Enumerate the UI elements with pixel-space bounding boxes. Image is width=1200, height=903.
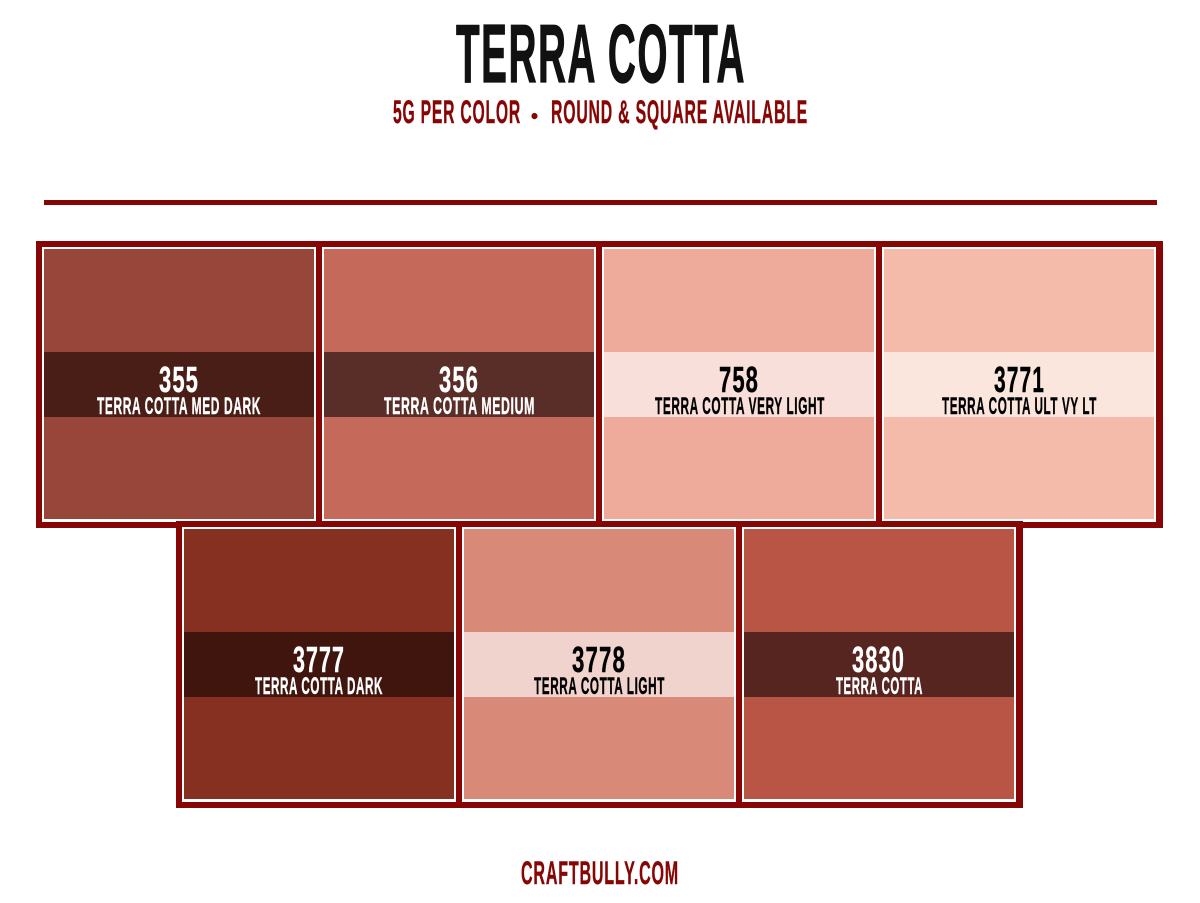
swatch: 355: 355 — [159, 359, 199, 400]
footer: CRAFTBULLY.COM — [521, 855, 679, 891]
swatch: 355 — [42, 247, 316, 522]
swatch: 356: TERRA COTTA MEDIUM — [384, 393, 535, 420]
swatch: 356 — [322, 247, 596, 522]
swatch: 3830 — [742, 527, 1016, 802]
swatch: 3777: TERRA COTTA DARK — [255, 673, 383, 700]
swatch: 3778: 3778 — [572, 639, 626, 680]
swatch: 758: 758 — [719, 359, 759, 400]
swatch: 355: TERRA COTTA MED DARK — [97, 393, 261, 420]
swatch: 3778: TERRA COTTA LIGHT — [534, 673, 665, 700]
swatch: 3777: 3777 — [293, 639, 345, 680]
subtitle: • — [531, 106, 539, 128]
panel: top row swatches — [36, 241, 1163, 528]
swatch: 3777 — [182, 527, 456, 802]
swatch: 356: 356 — [439, 359, 479, 400]
swatch: 3771 — [882, 247, 1156, 522]
swatch: 3778 — [462, 527, 736, 802]
swatch: 758 — [602, 247, 876, 522]
divider rule — [44, 200, 1157, 205]
swatch: 758: TERRA COTTA VERY LIGHT — [655, 393, 825, 420]
subtitle: 5G PER COLOR — [393, 94, 521, 130]
subtitle — [393, 94, 808, 130]
panel: bottom row swatches — [176, 521, 1023, 808]
swatch: 3771: 3771 — [994, 359, 1045, 400]
swatch: 3830: 3830 — [852, 639, 905, 680]
swatch: 3830: TERRA COTTA — [836, 673, 923, 700]
text: TERRA COTTA — [456, 7, 746, 100]
text: ROUND & SQUARE AVAILABLE — [551, 94, 808, 130]
